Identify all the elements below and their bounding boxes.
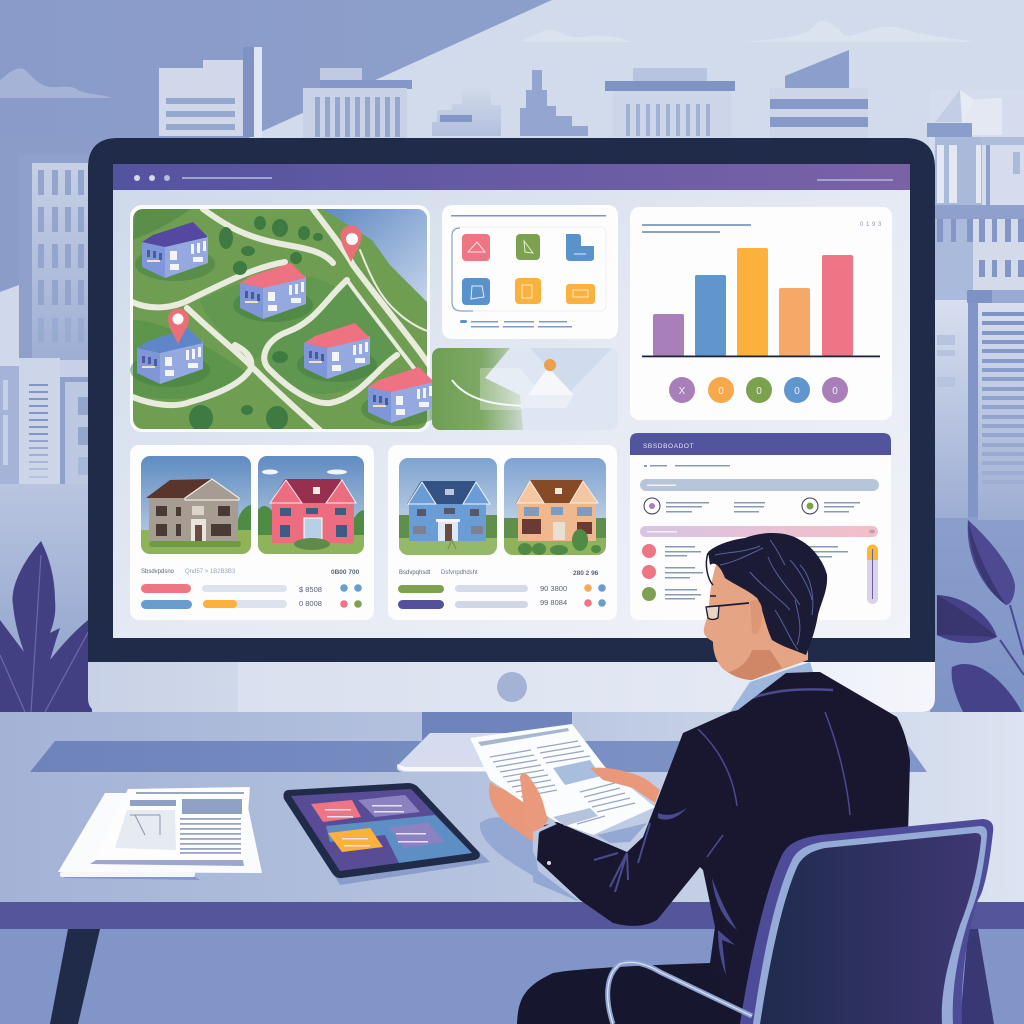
report slider <box>867 544 878 604</box>
panel: landscape inset <box>432 348 618 430</box>
icon tile: orange <box>515 278 541 304</box>
panel: property card 1: 0 8008 <box>299 599 322 608</box>
plant: left <box>0 541 92 712</box>
panel: property card 1: $ 8508 <box>299 585 322 594</box>
icon tile: orange wide <box>566 284 595 304</box>
legend circles: 0 <box>794 386 800 397</box>
chair <box>740 819 993 1024</box>
panel: property card 2 <box>388 445 617 620</box>
panel: map <box>130 205 432 432</box>
person <box>517 533 910 1024</box>
right hand <box>590 768 660 803</box>
map pin: left <box>168 308 189 344</box>
icon grid caption lines <box>460 320 572 328</box>
panel: property card 2: 90 3800 <box>540 584 567 593</box>
card 2 bars <box>398 585 528 609</box>
desk <box>0 712 1024 1024</box>
report row: grey band <box>640 479 879 514</box>
suit <box>537 672 910 1024</box>
legend circles: 0 <box>832 386 838 397</box>
monitor <box>88 138 935 712</box>
tablet <box>284 783 490 885</box>
roads <box>133 209 427 429</box>
report row: pink band <box>640 526 878 537</box>
photo: peach house <box>504 458 606 555</box>
chair back <box>740 819 993 1024</box>
panel: property card 2: Dsfvnpdhdsht <box>441 570 478 576</box>
photo: red house <box>258 456 364 554</box>
panel: property card 2: 280 2 96 <box>573 570 599 577</box>
monitor stand <box>397 712 575 772</box>
paper <box>470 724 655 835</box>
skyline: right towers <box>927 90 1024 520</box>
neck and face <box>704 565 808 680</box>
card 1 caption: Sbsdvpdsno <box>141 569 175 575</box>
skyline: left towers <box>0 155 92 484</box>
legs <box>517 963 770 1024</box>
icon tile: blue notched <box>566 234 594 261</box>
hair strands <box>715 540 813 650</box>
chair arm <box>608 962 752 1024</box>
desk shadows under hands and sleeve <box>480 817 647 902</box>
panel: property card 2: 99 8084 <box>540 598 567 607</box>
card 1 bars <box>141 584 287 609</box>
map pin: top <box>340 225 361 262</box>
report header: SBSDBOADOT <box>643 443 694 450</box>
hair <box>708 533 827 655</box>
document stack <box>58 787 262 880</box>
bars <box>653 248 853 356</box>
panel: property card 1: 0B00 700 <box>331 569 360 576</box>
legend circles: 0 <box>718 386 724 397</box>
card 2 caption: Bsdvpqhsdt <box>399 570 431 576</box>
icon tile: green <box>516 234 540 260</box>
photo: beige house <box>141 456 251 554</box>
photo: blue house <box>399 458 497 555</box>
screen background <box>113 164 910 638</box>
hand-held report <box>470 724 660 860</box>
icon tile: blue outline <box>462 278 490 305</box>
shirt cuff <box>533 822 557 860</box>
panel: icon grid <box>442 205 618 339</box>
plant: right <box>937 520 1024 712</box>
clouds <box>0 21 975 98</box>
tablet tiles <box>311 795 444 852</box>
panel: report <box>630 433 891 620</box>
panel: property card 1 <box>130 445 374 620</box>
shirt collar <box>730 662 813 712</box>
ear <box>750 600 762 634</box>
desk front edge <box>0 902 1024 929</box>
suit seams <box>594 689 850 892</box>
glasses <box>706 596 749 620</box>
panel: bar chart: 0 1 9 3 <box>860 222 882 228</box>
legend circles: X <box>679 386 686 397</box>
legend circles <box>669 377 848 403</box>
trees <box>189 216 323 431</box>
left hand <box>489 772 548 842</box>
desk legs <box>50 929 994 1024</box>
thumb <box>520 774 548 842</box>
monitor bezel <box>88 138 935 662</box>
panel: property card 1: Qnd57 > 1B2B3B3 <box>185 569 236 575</box>
report header <box>630 433 891 455</box>
desk back band <box>30 741 927 772</box>
map houses <box>130 222 441 426</box>
panel: bar chart <box>630 207 892 420</box>
monitor chin <box>88 650 935 712</box>
legend circles: 0 <box>756 386 762 397</box>
report rows <box>642 544 878 604</box>
icon tile: red <box>462 234 490 261</box>
browser bar <box>113 164 910 190</box>
skyline: top row of buildings <box>0 47 1024 520</box>
